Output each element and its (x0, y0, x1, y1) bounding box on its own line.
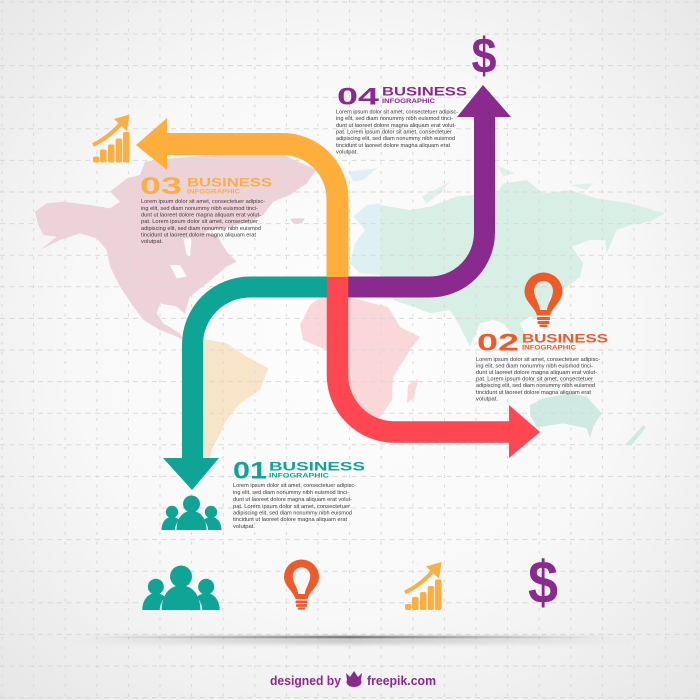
paragraph 01: ing elit, sed diam nonummy nibh euismod tinci- (233, 490, 349, 496)
paragraph 01: volutpat. (233, 524, 255, 530)
paragraph 03: ing elit, sed diam nonummy nibh euismod tinci- (141, 206, 258, 212)
heading 01: BUSINESS (269, 460, 365, 474)
icon: dollar bottom: $ (528, 549, 558, 616)
paragraph 03 (141, 199, 265, 245)
paragraph 03: Lorem ipsum dolor sit amet, consectetuer adipisc- (141, 199, 265, 205)
number 02: 02 (477, 330, 519, 356)
paragraph 04: Lorem ipsum dolor sit amet, consectetuer adipisc- (336, 110, 458, 116)
paragraph 01: Lorem ipsum dolor sit amet, consectetuer adipisc- (233, 483, 356, 489)
paragraph 03: pat. Lorem ipsum dolor sit amet, consectetuer (141, 219, 258, 225)
heading 02: BUSINESS (522, 332, 608, 346)
paragraph 03: dunt ut laoreet dolore magna aliquam erat volut- (141, 212, 261, 218)
map: Europe (350, 203, 381, 275)
paragraph 04: tincidunt ut laoreet dolore magna aliquam erat (336, 143, 450, 149)
map: North America and Greenland (35, 155, 317, 340)
icon: light bulb top (524, 272, 562, 327)
map: Africa (300, 292, 420, 420)
number 04: 04 (337, 84, 380, 110)
paragraph 02: pat. Lorem ipsum dolor sit amet, consectetuer (476, 376, 593, 382)
paragraph 02 (476, 357, 600, 402)
subheading 04: INFOGRAPHIC (382, 99, 436, 105)
icon: light bulb bottom (284, 560, 319, 610)
heading 04: BUSINESS (382, 84, 467, 98)
map: Hudson Bay and lakes (170, 238, 192, 278)
footer credit (270, 671, 436, 688)
map: Madagascar (407, 379, 418, 403)
block 01 (233, 458, 365, 530)
paragraph 03: volutpat. (141, 239, 163, 245)
block 04 (336, 84, 467, 156)
arrow: purple pointing up (348, 85, 511, 287)
map: Svalbard (348, 168, 377, 182)
paragraph 04: dunt ut laoreet dolore magna aliquam erat volut- (336, 123, 456, 129)
paragraph 03: adipiscing elit, sed diam nonummy nibh euismod (141, 226, 261, 232)
icon: people bottom (142, 565, 220, 610)
number 01: 01 (233, 458, 267, 484)
icon: crown (346, 671, 362, 687)
paragraph 02: tincidunt ut laoreet dolore magna aliquam erat (476, 390, 591, 396)
footer text left: designed by (270, 674, 341, 688)
icon: people top (162, 496, 222, 530)
paragraph 01: dunt ut laoreet dolore magna aliquam erat volut- (233, 497, 352, 503)
map: South America (200, 338, 268, 470)
paragraph 01 (233, 483, 356, 530)
block 03 (140, 173, 272, 245)
paragraph 01: adipiscing elit, sed diam nonummy nibh euismod (233, 510, 352, 516)
paragraph 04: volutpat. (336, 150, 358, 156)
number 03: 03 (140, 173, 182, 200)
subheading 02: INFOGRAPHIC (522, 346, 577, 352)
map: Eurasia (380, 180, 664, 350)
paragraph 02: adipiscing elit, sed diam nonummy nibh euismod (476, 383, 595, 389)
arrow: orange pointing left (136, 118, 338, 277)
paragraph 01: tincidunt ut laoreet dolore magna aliquam erat (233, 517, 347, 523)
paragraph 02: ing elit, sed diam nonummy nibh euismod tinci- (476, 364, 593, 370)
map: arctic islands (422, 165, 593, 203)
shelf shadow (60, 636, 640, 644)
arrow: red pointing right (338, 277, 540, 458)
map: Australia (530, 393, 646, 445)
paragraph 02: volutpat. (476, 396, 498, 402)
paragraph 04 (336, 110, 458, 156)
footer text right: freepik.com (367, 674, 436, 688)
paragraph 04: adipiscing elit, sed diam nonummy nibh euismod (336, 136, 455, 142)
paragraph 04: pat. Lorem ipsum dolor sit amet, consectetuer (336, 130, 452, 136)
world map (35, 155, 664, 470)
paragraph 02: dunt ut laoreet dolore magna aliquam erat volut- (476, 370, 597, 376)
icon: growth chart bottom (405, 562, 442, 610)
paragraph 03: tincidunt ut laoreet dolore magna aliquam erat (141, 232, 256, 238)
arrow: teal pointing down (163, 287, 327, 490)
heading 03: BUSINESS (187, 176, 272, 190)
subheading 01: INFOGRAPHIC (269, 474, 330, 480)
paragraph 04: ing elit, sed diam nonummy nibh euismod tinci- (336, 116, 453, 122)
paragraph 02: Lorem ipsum dolor sit amet, consectetuer adipisc- (476, 357, 600, 363)
block 02 (476, 330, 608, 402)
subheading 03: INFOGRAPHIC (187, 190, 241, 196)
icon: dollar top: $ (472, 28, 497, 84)
paragraph 01: pat. Lorem ipsum dolor sit amet, consectetuer (233, 504, 350, 510)
icon: growth chart top (93, 114, 130, 162)
